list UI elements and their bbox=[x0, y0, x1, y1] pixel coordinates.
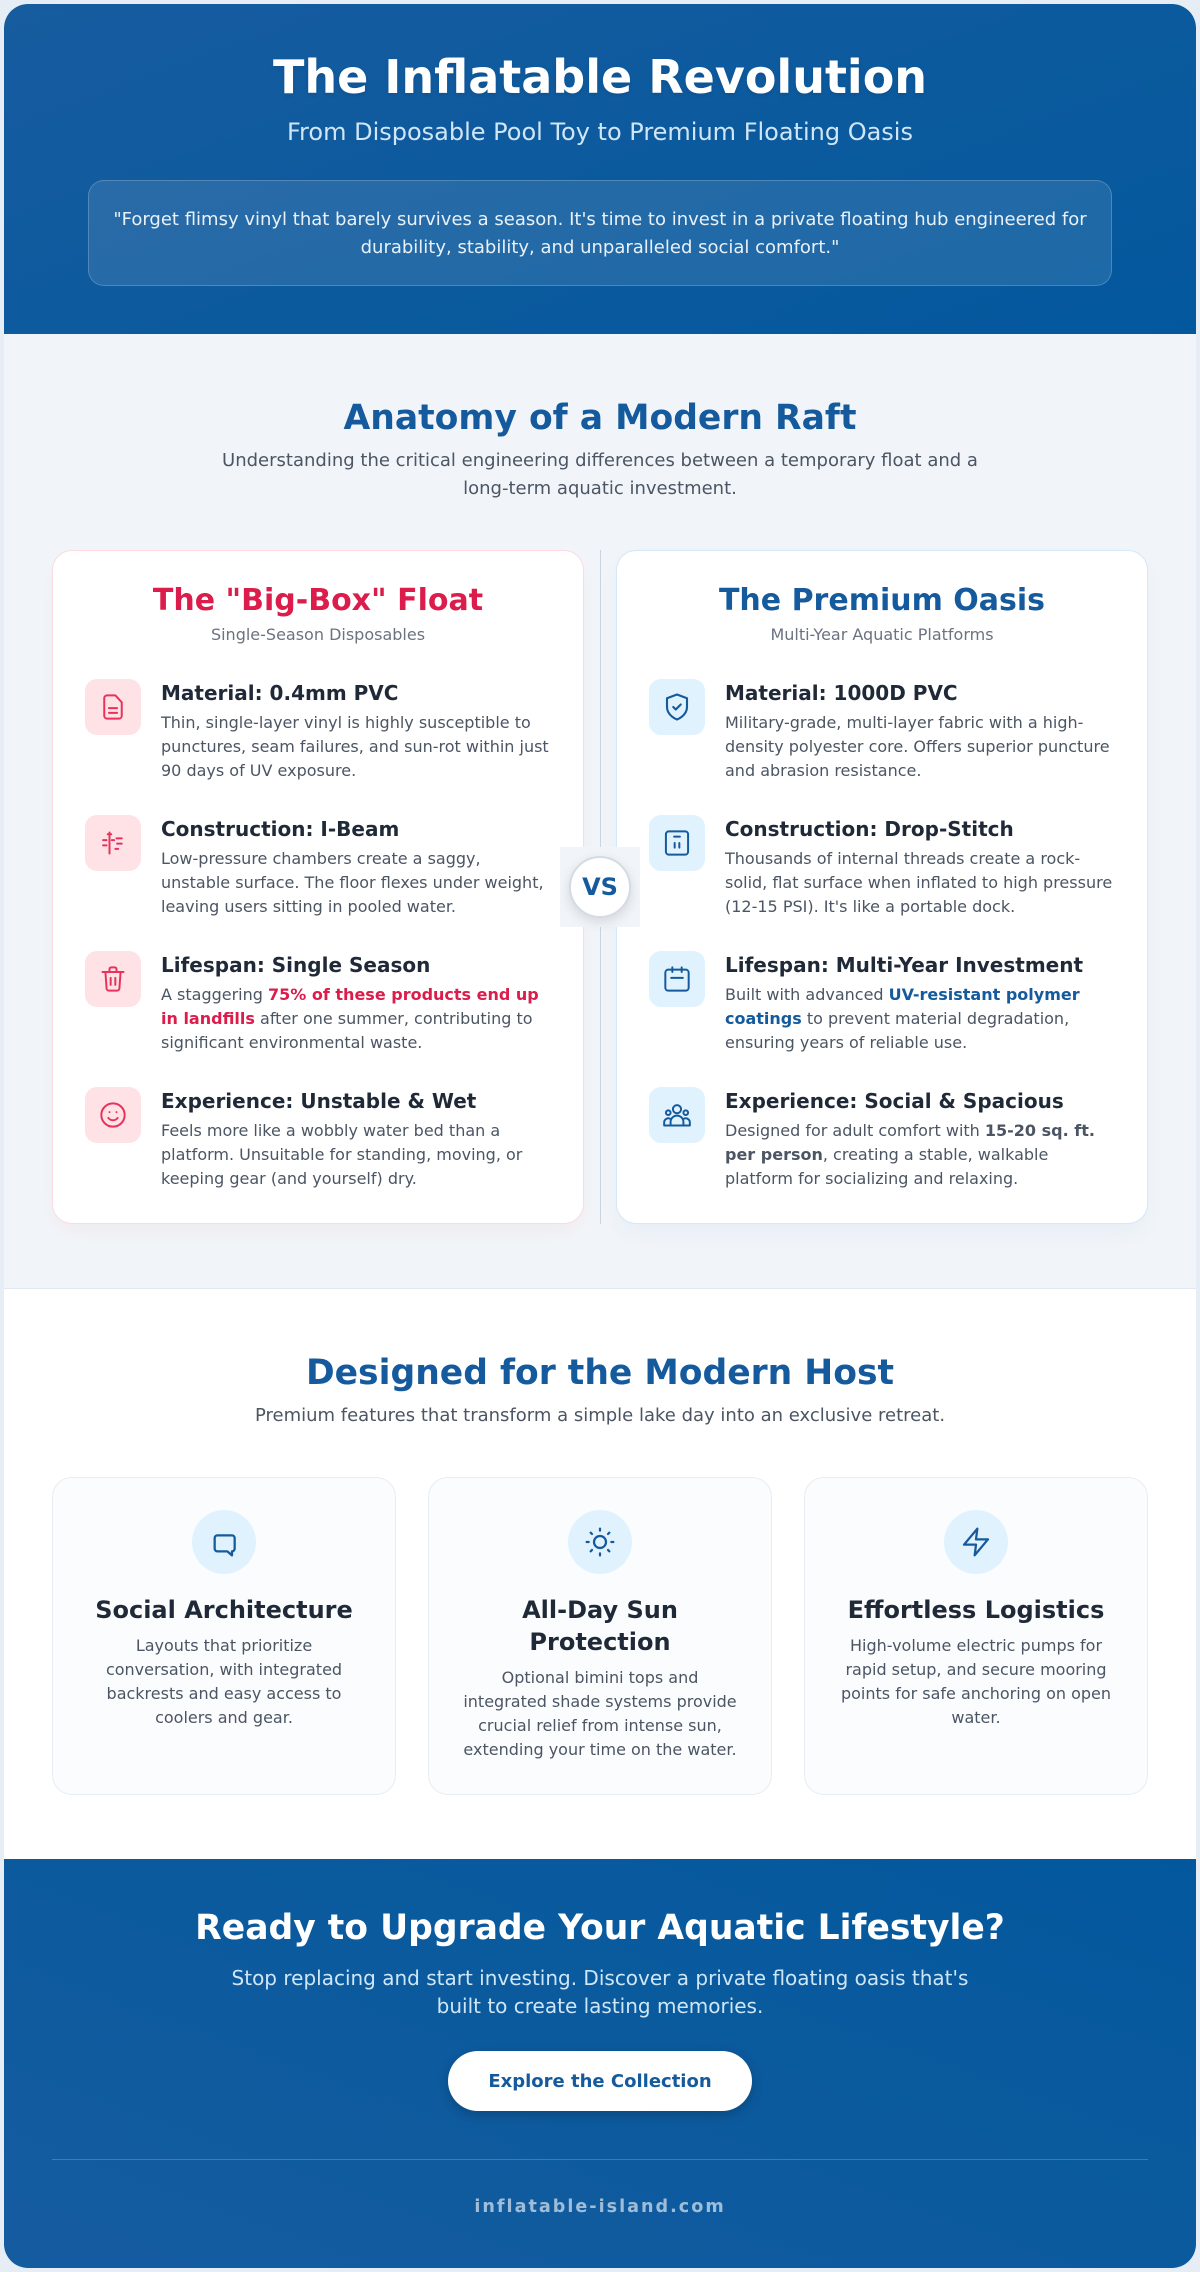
item: construction: solid, flat surface when inflated to high pressure bbox=[725, 873, 1112, 892]
feature: sun protection: Protection bbox=[529, 1628, 671, 1656]
item: lifespan: ensuring years of reliable use. bbox=[725, 1033, 967, 1052]
item: material: punctures, seam failures, and sun-rot within just bbox=[161, 737, 549, 756]
quote callout: durability, stability, and unparalleled social comfort." bbox=[361, 237, 839, 258]
feature: effortless logistics: High-volume electric pumps for bbox=[850, 1636, 1102, 1655]
feature: social architecture: Social Architecture bbox=[95, 1596, 353, 1624]
item: experience: keeping gear (and yourself) dry. bbox=[161, 1169, 417, 1188]
item: lifespan bbox=[649, 951, 1083, 1052]
item: experience bbox=[649, 1087, 1095, 1188]
item: construction: unstable surface. The floor flexes under weight, bbox=[161, 873, 544, 892]
quote callout bbox=[88, 180, 1112, 286]
item: construction bbox=[649, 815, 1112, 916]
item: material: Material: 0.4mm PVC bbox=[161, 681, 398, 705]
item: material: and abrasion resistance. bbox=[725, 761, 921, 780]
panel: anatomy comparison bbox=[4, 334, 1196, 1289]
anatomy intro text bbox=[222, 450, 978, 498]
heading: modern host: Designed for the Modern Host bbox=[306, 1353, 894, 1393]
anatomy intro text: Understanding the critical engineering differences between a temporary float and a bbox=[222, 450, 978, 470]
website link: inflatable-island.com bbox=[474, 2196, 726, 2216]
item: material: density polyester core. Offers superior puncture bbox=[725, 737, 1110, 756]
feature: effortless logistics: points for safe anchoring on open bbox=[841, 1684, 1111, 1703]
item: experience: Designed for adult comfort with 15-20 sq. ft. bbox=[725, 1121, 1095, 1140]
header panel bbox=[4, 4, 1196, 334]
item: construction: Thousands of internal threads create a rock- bbox=[725, 849, 1080, 868]
feature: sun protection: All-Day Sun bbox=[522, 1596, 678, 1624]
icon: chat bubble bbox=[192, 1510, 256, 1574]
feature: social architecture: conversation, with integrated bbox=[106, 1660, 342, 1679]
quote callout: "Forget flimsy vinyl that barely survives a season. It's time to invest in a private floating hub engineered for bbox=[113, 209, 1087, 230]
item: material: Thin, single-layer vinyl is highly susceptible to bbox=[161, 713, 531, 732]
item: experience: Feels more like a wobbly water bed than a bbox=[161, 1121, 500, 1140]
feature: social architecture: backrests and easy access to bbox=[107, 1684, 341, 1703]
heading: anatomy: Anatomy of a Modern Raft bbox=[344, 398, 856, 438]
cta text: Stop replacing and start investing. Discover a private floating oasis that's bbox=[232, 1966, 968, 1990]
panel: big-box float bbox=[52, 550, 584, 1224]
item: lifespan: coatings to prevent material degradation, bbox=[725, 1009, 1069, 1028]
cta heading: Ready to Upgrade Your Aquatic Lifestyle? bbox=[195, 1908, 1005, 1948]
center divider bbox=[600, 550, 601, 1224]
feature: effortless logistics bbox=[804, 1477, 1148, 1795]
feature: effortless logistics: Effortless Logistics bbox=[848, 1596, 1104, 1624]
card heading: The Premium Oasis bbox=[719, 583, 1045, 618]
panel: modern host features bbox=[4, 1288, 1196, 1859]
item: experience: Experience: Unstable & Wet bbox=[161, 1089, 476, 1113]
icon: document bbox=[85, 679, 141, 735]
item: experience bbox=[85, 1087, 522, 1188]
icon: smile bbox=[85, 1087, 141, 1143]
item: lifespan: Built with advanced UV-resistant polymer bbox=[725, 985, 1080, 1004]
feature: effortless logistics: rapid setup, and secure mooring bbox=[845, 1660, 1107, 1679]
item: experience: platform for socializing and relaxing. bbox=[725, 1169, 1018, 1188]
footer divider bbox=[52, 2159, 1148, 2160]
anatomy intro text: long-term aquatic investment. bbox=[463, 478, 737, 498]
subtitle: From Disposable Pool Toy to Premium Floating Oasis bbox=[287, 118, 913, 146]
title: The Inflatable Revolution bbox=[273, 50, 927, 104]
feature: social architecture: coolers and gear. bbox=[155, 1708, 293, 1727]
icon: calendar bbox=[649, 951, 705, 1007]
feature: sun protection: Optional bimini tops and bbox=[502, 1668, 698, 1687]
item: construction: Construction: I-Beam bbox=[161, 817, 399, 841]
icon: stitched panel bbox=[649, 815, 705, 871]
item: construction: Low-pressure chambers create a saggy, bbox=[161, 849, 481, 868]
feature: social architecture: Layouts that prioritize bbox=[136, 1636, 312, 1655]
item: experience: per person, creating a stable, walkable bbox=[725, 1145, 1048, 1164]
card heading: The "Big-Box" Float bbox=[153, 583, 483, 618]
icon: people bbox=[649, 1087, 705, 1143]
feature: sun protection: integrated shade systems provide bbox=[463, 1692, 737, 1711]
item: material bbox=[649, 679, 1110, 780]
cta button bbox=[448, 2051, 752, 2111]
item: material: 90 days of UV exposure. bbox=[161, 761, 356, 780]
item: construction: (12-15 PSI). It's like a portable dock. bbox=[725, 897, 1015, 916]
cta button: Explore the Collection bbox=[488, 2071, 712, 2092]
feature: social architecture bbox=[52, 1477, 396, 1795]
icon: lightning bbox=[944, 1510, 1008, 1574]
item: lifespan bbox=[85, 951, 539, 1052]
item: experience: platform. Unsuitable for standing, moving, or bbox=[161, 1145, 522, 1164]
icon: shield bbox=[649, 679, 705, 735]
VS badge bbox=[560, 847, 640, 927]
feature: sun protection: extending your time on the water. bbox=[463, 1740, 737, 1759]
item: material bbox=[85, 679, 549, 780]
panel: premium oasis bbox=[616, 550, 1148, 1224]
item: material: Material: 1000D PVC bbox=[725, 681, 958, 705]
cta text: built to create lasting memories. bbox=[437, 1994, 763, 2018]
item: construction bbox=[85, 815, 544, 916]
panel: call to action footer bbox=[4, 1859, 1196, 2268]
card subheading: Single-Season Disposables bbox=[211, 624, 425, 644]
cta text bbox=[232, 1966, 968, 2018]
icon: i-beam bbox=[85, 815, 141, 871]
icon: sun bbox=[568, 1510, 632, 1574]
item: material: Military-grade, multi-layer fabric with a high- bbox=[725, 713, 1083, 732]
item: lifespan: in landfills after one summer, contributing to bbox=[161, 1009, 533, 1028]
modern host intro text: Premium features that transform a simple lake day into an exclusive retreat. bbox=[255, 1405, 945, 1426]
feature: effortless logistics: water. bbox=[951, 1708, 1001, 1727]
item: lifespan: significant environmental waste. bbox=[161, 1033, 422, 1052]
item: experience: Experience: Social & Spacious bbox=[725, 1089, 1064, 1113]
VS badge: VS bbox=[582, 873, 618, 901]
feature: sun protection: crucial relief from intense sun, bbox=[478, 1716, 722, 1735]
item: lifespan: Lifespan: Single Season bbox=[161, 953, 430, 977]
item: lifespan: Lifespan: Multi-Year Investment bbox=[725, 953, 1083, 977]
feature: sun protection bbox=[428, 1477, 772, 1795]
icon: trash bbox=[85, 951, 141, 1007]
item: construction: Construction: Drop-Stitch bbox=[725, 817, 1014, 841]
item: construction: leaving users sitting in pooled water. bbox=[161, 897, 456, 916]
card subheading: Multi-Year Aquatic Platforms bbox=[770, 624, 994, 644]
item: lifespan: A staggering 75% of these products end up bbox=[161, 985, 539, 1004]
